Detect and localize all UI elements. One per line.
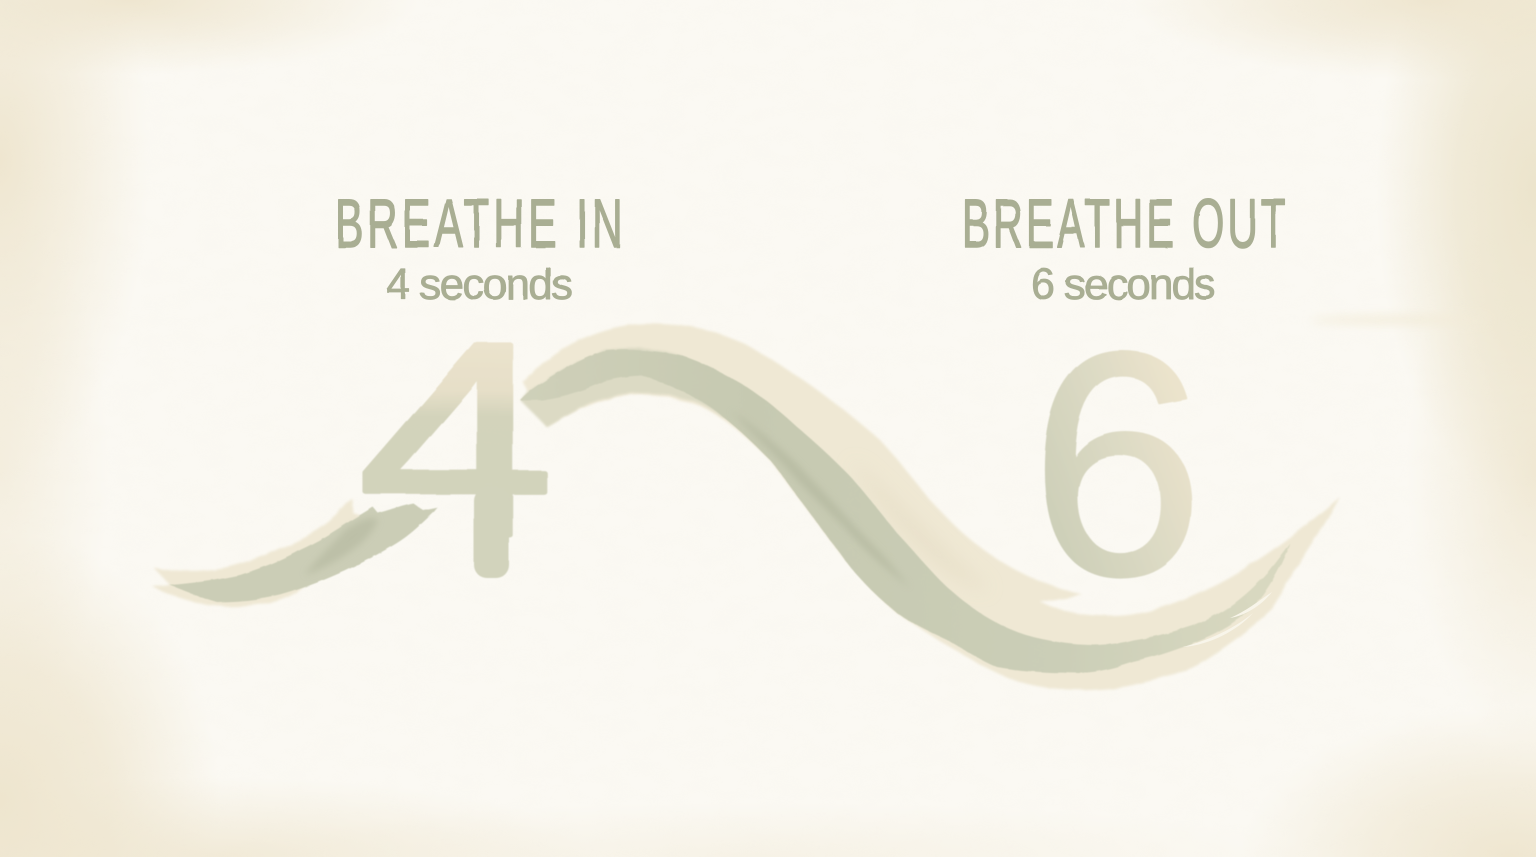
numeral: 4: 4 — [358, 285, 554, 594]
heading: breathe out — [962, 185, 1286, 309]
wave: dry brush highlights — [1183, 592, 1272, 647]
wave: sage band — [520, 349, 1290, 673]
heading: breathe out: BREATHE OUT — [962, 185, 1286, 263]
wave: dark streak — [730, 410, 910, 588]
wave: beige wash — [523, 324, 1340, 690]
numeral: 6: 6 — [1030, 287, 1204, 642]
label: 4 seconds: 4 seconds — [386, 260, 573, 309]
heading: breathe in — [335, 186, 623, 309]
label: 6 seconds: 6 seconds — [1031, 260, 1216, 309]
brush stroke: main wave — [520, 324, 1340, 690]
wave: pale sage band — [520, 348, 740, 427]
heading: breathe in: BREATHE IN — [335, 186, 623, 263]
wave: warm mid wash — [850, 460, 990, 590]
brush stroke: left rising wave — [153, 498, 438, 606]
